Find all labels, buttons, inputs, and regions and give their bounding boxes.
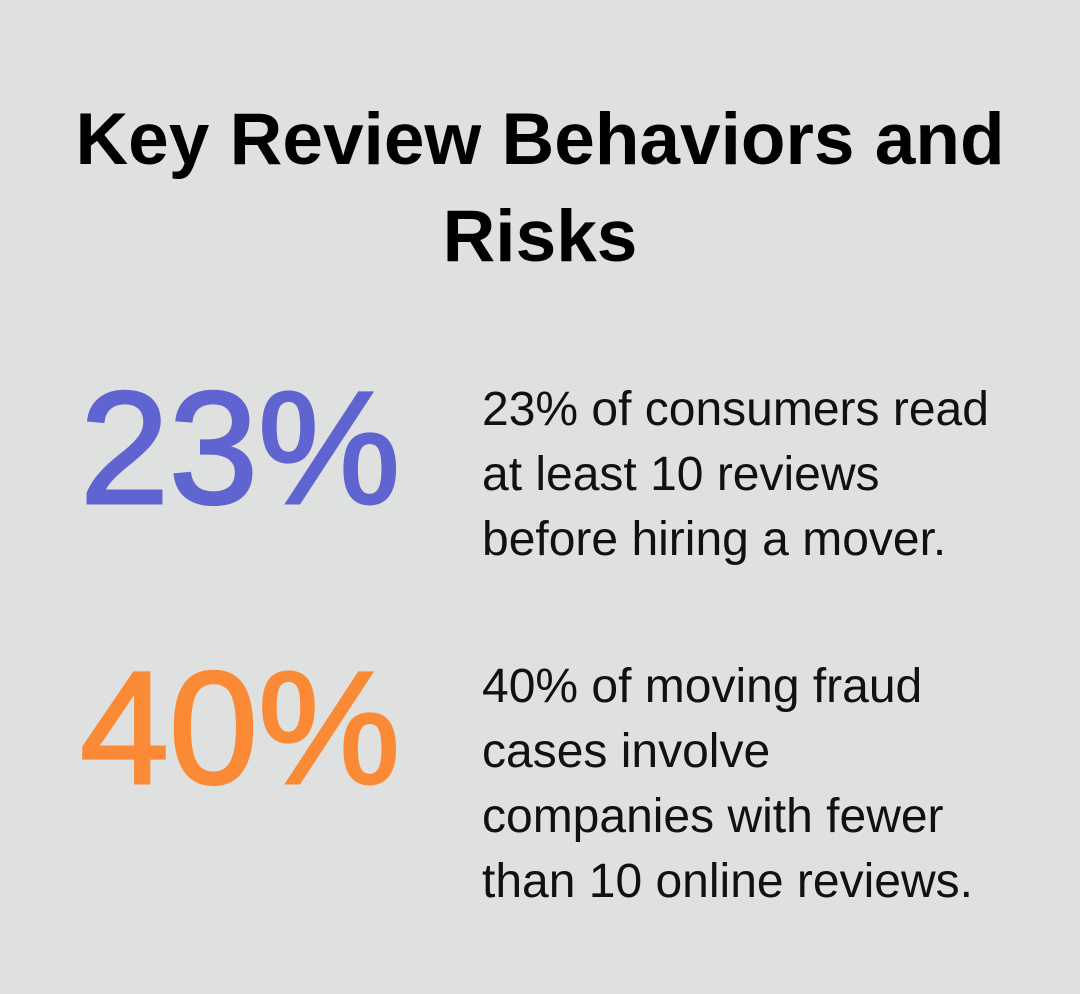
stat: 23%: 23% [80,358,400,537]
text block: 40% description: than 10 online reviews. [482,855,973,908]
text block: 40% description: 40% of moving fraud [482,660,922,713]
title [75,99,1005,277]
title: Key Review Behaviors and [75,99,1005,180]
text block: 23% description: before hiring a mover. [482,513,946,566]
text block: 40% description: companies with fewer [482,790,944,843]
title: Risks [443,196,637,277]
text block: 40% description: cases involve [482,725,770,778]
text block: 40% description [482,660,973,908]
text block: 23% description [482,383,989,566]
text block: 23% description: at least 10 reviews [482,448,880,501]
stat: 40%: 40% [80,638,400,817]
text block: 23% description: 23% of consumers read [482,383,989,436]
